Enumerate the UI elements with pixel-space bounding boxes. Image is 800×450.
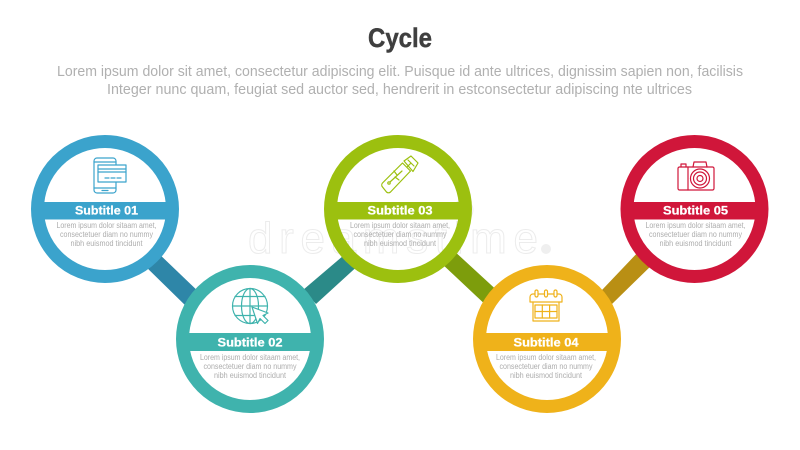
subtitle text block: Lorem ipsum dolor sit amet, consectetur adipiscing elit. Puisque id ante ultrices, dignissim sapien non, facilisis [57, 63, 743, 80]
body text 02: Lorem ipsum dolor sitaam amet, [200, 353, 300, 362]
heading 02: Subtitle 02 [218, 336, 283, 350]
connector: 03 to 04 [440, 249, 502, 309]
body text 01 [56, 221, 156, 248]
circle 01 [38, 142, 172, 276]
icon: globe with cursor [232, 288, 268, 324]
body text 01: Lorem ipsum dolor sitaam amet, [56, 221, 156, 230]
body text 03: Lorem ipsum dolor sitaam amet, [350, 221, 450, 230]
heading 04: Subtitle 04 [514, 336, 579, 350]
body text 05: nibh euismod tincidunt [660, 239, 732, 248]
body text 03 [350, 221, 450, 248]
body text 05: consectetuer diam no nummy [649, 230, 742, 239]
connector: 01 to 02 [141, 250, 203, 310]
icon: usb drive [382, 156, 418, 193]
heading 03: Subtitle 03 [368, 204, 433, 218]
heading 05: Subtitle 05 [663, 204, 728, 218]
icon: phone with card [94, 158, 126, 193]
body text 02: nibh euismod tincidunt [214, 371, 287, 380]
watermark: dreamstime [248, 214, 538, 263]
body text 03: nibh euismod tincidunt [364, 239, 437, 248]
body text 04: Lorem ipsum dolor sitaam amet, [496, 353, 596, 362]
body text 02: consectetuer diam no nummy [204, 362, 296, 371]
subtitle text block: Integer nunc quam, feugiat sed auctor sed, hendrerit in estconsectetur adipiscing nte ultrices [107, 81, 692, 98]
circle 04 [480, 272, 614, 406]
connector: 02 to 03 [303, 250, 362, 304]
body text 01: nibh euismod tincidunt [70, 239, 143, 248]
body text 02 [200, 353, 300, 380]
body text 01: consectetuer diam no nummy [60, 230, 153, 239]
icon: calendar [530, 290, 562, 321]
body text 05 [646, 221, 746, 248]
body text 04 [496, 353, 596, 380]
heading 01: Subtitle 01 [75, 204, 138, 218]
body text 04: consectetuer diam no nummy [500, 362, 592, 371]
title: Cycle [368, 23, 432, 53]
body text 03: consectetuer diam no nummy [354, 230, 446, 239]
circle 05 [627, 142, 762, 276]
circle 02 [182, 272, 318, 406]
subtitle text block [57, 63, 743, 98]
icon: camera [678, 162, 714, 190]
connector: 04 to 05 [602, 248, 655, 304]
body text 04: nibh euismod tincidunt [510, 371, 583, 380]
circle 03 [330, 142, 466, 276]
body text 05: Lorem ipsum dolor sitaam amet, [646, 221, 746, 230]
